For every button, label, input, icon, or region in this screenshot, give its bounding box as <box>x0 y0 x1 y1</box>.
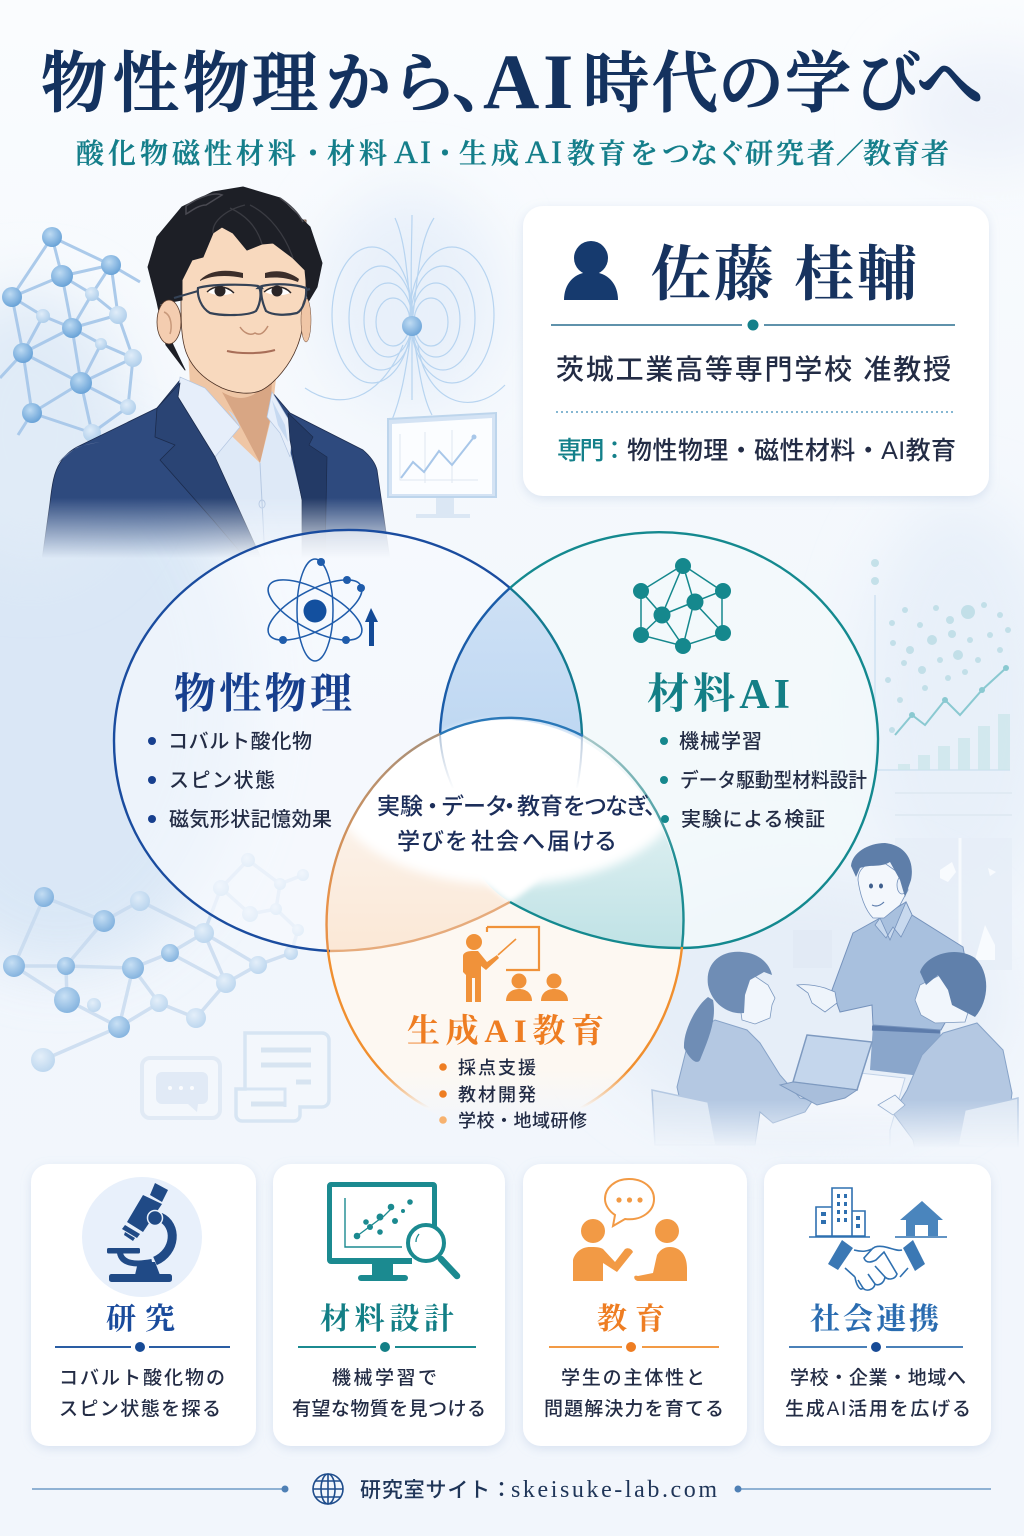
overlap: physics and materials AI <box>441 588 583 740</box>
affiliation: 茨城工業高等専門学校 准教授 <box>556 354 951 385</box>
left lapel <box>155 383 262 560</box>
circle fill: physics <box>114 530 583 951</box>
center message <box>377 793 667 854</box>
center message: 学びを社会へ届ける <box>397 828 617 854</box>
card divider <box>298 1342 476 1352</box>
list: physics: 磁気形状記憶効果 <box>169 808 332 831</box>
outline: education bottom arc <box>328 947 682 1128</box>
card description: コバルト酸化物の <box>59 1367 225 1389</box>
collar <box>178 377 293 457</box>
subtitle: I <box>551 135 562 171</box>
specialty: 物性物理・磁性材料・AI教育 <box>627 437 956 465</box>
nose <box>240 326 268 334</box>
list: generative AI education: 教材開発 <box>458 1085 536 1105</box>
classroom illustration <box>652 838 1018 1155</box>
list: materials AI <box>660 730 867 831</box>
list: materials AI: 実験による検証 <box>681 808 825 831</box>
list: generative AI education: 学校・地域研修 <box>458 1111 587 1131</box>
chairs <box>652 1090 716 1145</box>
site text: skeisuke-lab.com <box>511 1477 717 1503</box>
window backdrop <box>1002 905 1012 940</box>
list: physics <box>148 730 332 831</box>
magnetic field lines <box>305 215 505 420</box>
list: generative AI education <box>439 1058 587 1131</box>
neck <box>188 358 276 463</box>
outline: physics lower arc <box>330 902 510 951</box>
card description: 機械学習で <box>332 1367 437 1389</box>
card description <box>59 1367 225 1420</box>
icon: globe <box>313 1474 343 1504</box>
icon: monitor with magnifier <box>327 1182 457 1281</box>
outline: education left arc <box>327 734 440 951</box>
list: generative AI education: 採点支援 <box>458 1058 536 1078</box>
subtitle: ・生成 <box>431 138 519 170</box>
title: 時代の学びへ <box>583 48 983 121</box>
overlap: physics and education <box>328 832 508 950</box>
card divider <box>789 1342 963 1352</box>
subtitle: 教育をつなぐ研究者／教育者 <box>567 138 949 170</box>
heading: physics: 物性物理 <box>174 671 352 718</box>
panel: community card <box>764 1164 991 1446</box>
divider <box>551 320 955 330</box>
site text: 研究室サイト： <box>360 1479 512 1502</box>
icon: conversation <box>573 1179 687 1281</box>
venn diagram <box>114 530 878 1130</box>
subtitle: A <box>525 135 549 171</box>
molecule decoration: top left <box>0 227 142 442</box>
icon: buildings, house and handshake <box>809 1188 947 1290</box>
card heading: 材料設計 <box>320 1303 454 1336</box>
outline: education right arc <box>583 736 684 947</box>
panel: materials design card <box>273 1164 505 1446</box>
subtitle: I <box>420 135 431 171</box>
card description <box>785 1367 971 1420</box>
center glow <box>348 720 665 888</box>
card heading: 研究 <box>106 1303 175 1336</box>
outline: physics arc in lens <box>510 588 582 735</box>
list: materials AI: データ駆動型材料設計 <box>680 768 867 792</box>
card description: 生成AI活用を広げる <box>785 1398 971 1420</box>
specialty: 専門： <box>557 437 627 465</box>
hair <box>148 187 322 370</box>
eyebrows <box>200 271 299 282</box>
portrait illustration <box>42 187 390 560</box>
glasses <box>174 284 310 315</box>
icon: teacher and students <box>463 927 568 1002</box>
title: AI <box>483 38 573 125</box>
table <box>745 1068 905 1155</box>
triple overlap <box>442 718 581 902</box>
circle fill: generative AI education <box>326 720 683 1130</box>
card description <box>544 1367 724 1420</box>
icon: network <box>633 558 731 654</box>
title <box>41 38 983 125</box>
outline: materials outer arc <box>510 532 878 948</box>
panel: research card <box>31 1164 256 1446</box>
right lapel <box>288 413 327 560</box>
card description: 問題解決力を育てる <box>544 1398 724 1420</box>
card description: 学校・企業・地域へ <box>790 1367 966 1389</box>
student: girl <box>677 952 813 1145</box>
icon: microscope <box>82 1177 202 1297</box>
card divider <box>549 1342 719 1352</box>
footer <box>32 1474 991 1504</box>
card heading: 社会連携 <box>810 1303 939 1336</box>
faded arcs inside center <box>440 735 582 788</box>
data chart decoration <box>871 559 1012 815</box>
panel: education card <box>523 1164 747 1446</box>
eyes <box>207 286 291 296</box>
name: 佐藤 桂輔 <box>651 242 917 308</box>
icon: person <box>564 241 618 300</box>
title: 物性物理から、 <box>41 48 518 121</box>
outline: materials arc in lens <box>440 588 510 735</box>
mouth <box>227 350 275 353</box>
ear left <box>157 300 181 344</box>
heading: materials AI: 材料AI <box>647 671 790 718</box>
list: physics: コバルト酸化物 <box>168 730 312 753</box>
overlap: materials AI and education <box>488 754 682 947</box>
subtitle: 酸化物磁性材料・材料 <box>76 138 387 170</box>
heading: generative AI education: 生成AI教育 <box>407 1013 604 1050</box>
circle fill: materials AI <box>440 530 878 948</box>
center message: 実験・データ・教育をつなぎ、 <box>377 793 667 819</box>
subtitle: A <box>394 135 418 171</box>
card description: 学生の主体性と <box>561 1367 705 1389</box>
outline: education top arc <box>440 718 583 736</box>
student: boy <box>878 952 1012 1150</box>
card description: 有望な物質を見つける <box>292 1398 486 1420</box>
teacher <box>797 843 968 1078</box>
icon: atom <box>260 558 378 661</box>
face <box>181 220 306 393</box>
card description <box>292 1367 486 1420</box>
list: physics: スピン状態 <box>169 769 275 792</box>
panel: profile card <box>523 206 989 496</box>
site text <box>360 1477 717 1503</box>
molecule decoration: bottom left <box>3 853 309 1072</box>
monitor with line chart <box>388 413 496 518</box>
ear right <box>301 298 311 342</box>
laptop <box>780 1035 872 1105</box>
list: materials AI: 機械学習 <box>679 730 762 753</box>
card divider <box>55 1342 230 1352</box>
shirt <box>216 422 302 549</box>
outline: physics outer arc <box>114 530 510 951</box>
icon: chat bubbles and document <box>142 1033 329 1121</box>
card description: スピン状態を探る <box>59 1398 221 1420</box>
card heading: 教育 <box>597 1303 665 1336</box>
suit <box>42 380 390 560</box>
